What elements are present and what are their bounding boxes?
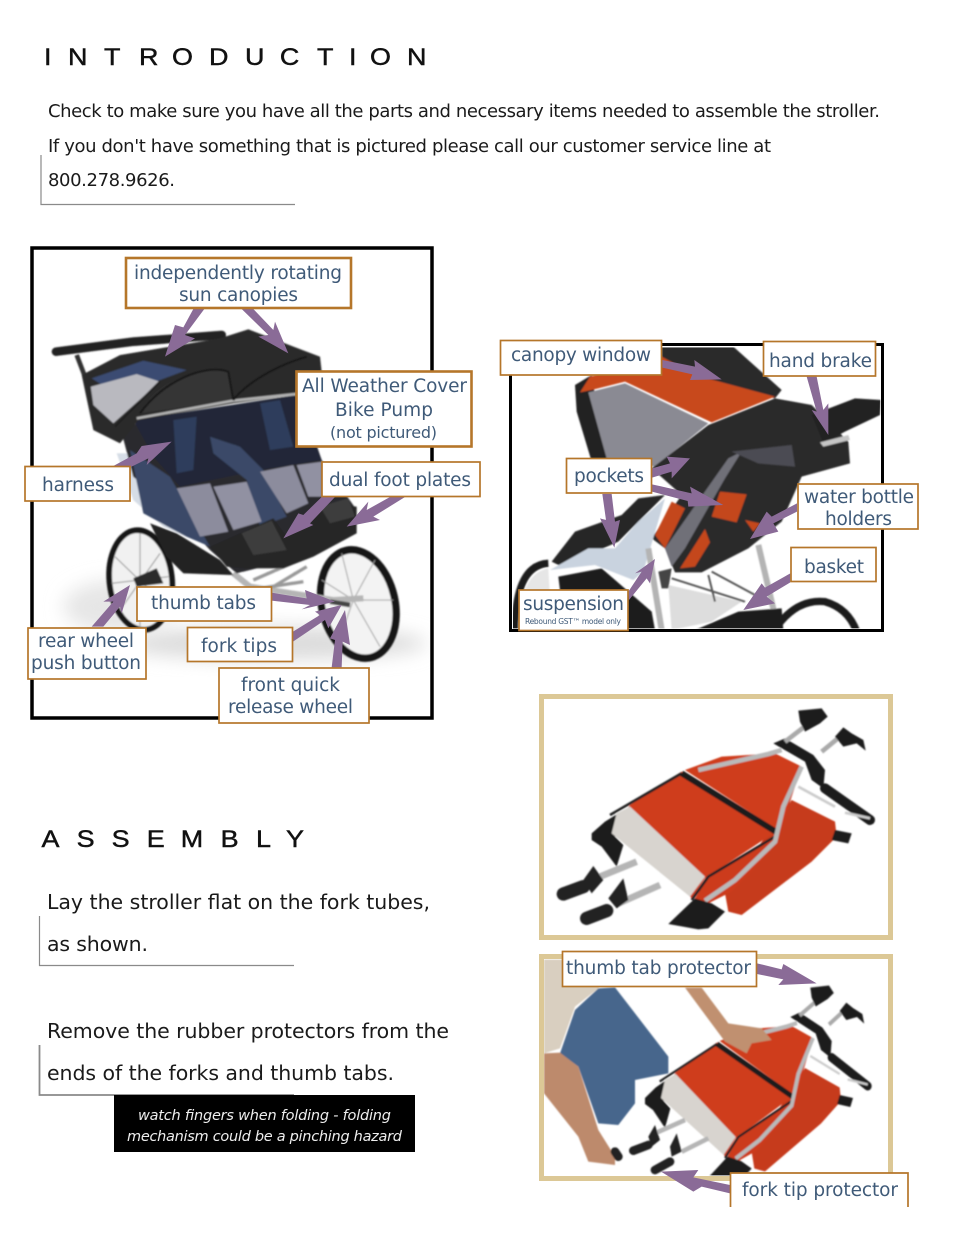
label: thumb tab protector: [562, 952, 756, 986]
photo: stroller lying flat: [563, 708, 870, 929]
text block: lay stroller flat: [40, 890, 430, 966]
text block: parts check instructions: [41, 101, 880, 204]
label: canopy window: canopy window: [511, 345, 651, 366]
label: hand brake: hand brake: [769, 351, 872, 372]
photo: double stroller: [56, 329, 427, 666]
frame and basket: [150, 523, 233, 575]
label: independently rotating sun canopies: sun canopies: [179, 285, 298, 306]
photo frame: [32, 248, 432, 718]
arrows: protector locations: [661, 963, 817, 1193]
label: basket: basket: [804, 557, 864, 578]
label: suspension: [519, 590, 628, 630]
label: thumb tabs: [137, 587, 272, 621]
label: independently rotating sun canopies: [126, 258, 351, 308]
arrows pointing to stroller parts: [92, 309, 405, 667]
label: thumb tab protector: thumb tab protector: [566, 958, 751, 979]
label: all weather cover and bike pump: Bike Pump: [335, 400, 433, 421]
label: dual foot plates: [322, 462, 480, 496]
label: all weather cover and bike pump: All Weather Cover: [302, 376, 467, 397]
label: front quick release wheel: [219, 668, 369, 723]
label: pockets: [566, 458, 652, 493]
label: fork tips: fork tips: [201, 636, 277, 657]
label: rear wheel push button: rear wheel: [38, 631, 134, 652]
label: harness: harness: [42, 475, 114, 496]
text block: parts check instructions: 800.278.9626.: [48, 170, 175, 191]
text block: remove rubber protectors: ends of the forks and thumb tabs.: [47, 1061, 394, 1085]
text block: parts check instructions: Check to make sure you have all the parts and necessary items needed to assemble the stroller.: [48, 101, 880, 122]
label: water bottle holders: [798, 484, 918, 530]
callout: pinching hazard warning: [114, 1095, 415, 1152]
label: basket: [791, 548, 876, 582]
label: suspension: suspension: [523, 594, 624, 615]
label: water bottle holders: water bottle: [804, 487, 914, 508]
text block: lay stroller flat: Lay the stroller flat on the fork tubes,: [47, 890, 430, 914]
arrows pointing to stroller parts: [600, 360, 828, 610]
panel: removing protectors photo: [542, 952, 908, 1207]
label: independently rotating sun canopies: independently rotating: [134, 263, 342, 284]
label: hand brake: [764, 342, 876, 376]
label: water bottle holders: holders: [825, 509, 892, 530]
label: dual foot plates: dual foot plates: [329, 470, 471, 491]
title: introduction: INTRODUCTION: [44, 44, 426, 71]
rear wheel: [104, 527, 177, 633]
photo: jogging stroller side view: [515, 347, 881, 632]
label: all weather cover and bike pump: (not pictured): [330, 423, 437, 442]
text block: parts check instructions: If you don't have something that is pictured please call our customer service line at: [48, 136, 771, 157]
front wheel: [316, 544, 401, 664]
callout: pinching hazard warning: mechanism could be a pinching hazard: [127, 1129, 403, 1145]
black canopy and handlebar: [56, 335, 222, 352]
grey seat panels: [177, 483, 228, 537]
label: thumb tabs: thumb tabs: [151, 593, 256, 614]
label: fork tip protector: [730, 1173, 908, 1207]
label: canopy window: [500, 340, 662, 375]
label: suspension: Rebound GST™ model only: [525, 617, 622, 626]
title: assembly: ASSEMBLY: [41, 826, 304, 853]
photo frame: [510, 344, 882, 630]
panel: folded stroller photo: [542, 696, 890, 938]
photo: person removing protectors: [544, 959, 868, 1184]
text block: remove rubber protectors: Remove the rubber protectors from the: [47, 1019, 449, 1043]
text block: lay stroller flat: as shown.: [47, 932, 148, 956]
panel: double stroller parts diagram: [25, 248, 480, 723]
label: harness: [25, 466, 130, 501]
label: rear wheel push button: [28, 628, 146, 679]
label: rear wheel push button: push button: [31, 653, 141, 674]
panel: single stroller side detail: [500, 340, 918, 632]
baskets: [210, 503, 357, 568]
callout: pinching hazard warning: watch fingers when folding - folding: [138, 1108, 391, 1124]
text block: remove rubber protectors: [40, 1019, 449, 1095]
label: fork tip protector: fork tip protector: [742, 1180, 898, 1201]
seat body: [117, 453, 207, 538]
label: pockets: pockets: [574, 466, 644, 487]
label: front quick release wheel: release wheel: [228, 697, 353, 718]
label: front quick release wheel: front quick: [241, 675, 340, 696]
label: all weather cover and bike pump: [296, 372, 472, 446]
label: fork tips: [188, 628, 292, 662]
